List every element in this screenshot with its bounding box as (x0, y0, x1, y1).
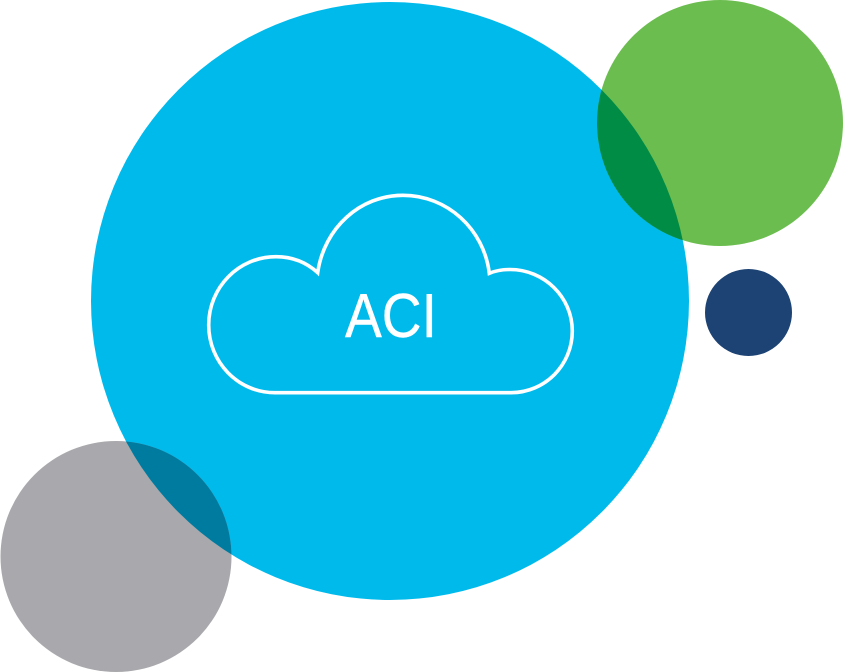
small navy circle (705, 269, 792, 356)
green and blue overlap (597, 90, 683, 240)
gray and blue overlap (126, 442, 232, 554)
large blue circle (91, 2, 689, 600)
gray circle (0, 441, 232, 672)
green circle (597, 0, 843, 246)
cloud label: ACI (345, 282, 437, 351)
icon: cloud outline (209, 195, 572, 393)
